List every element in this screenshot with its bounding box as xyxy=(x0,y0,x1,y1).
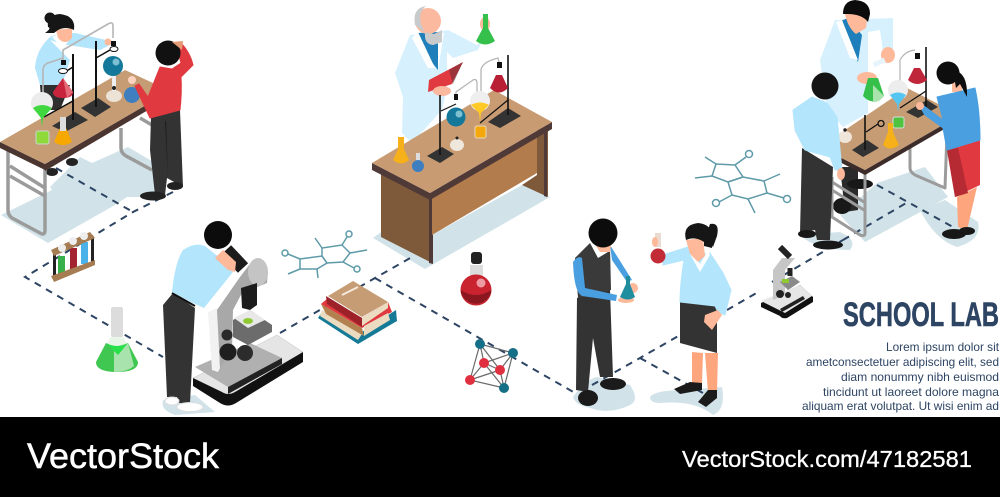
test tube rack xyxy=(51,232,95,282)
description text: ametconsectetuer adipiscing elit, sed xyxy=(806,355,999,369)
right desk legs xyxy=(832,133,947,236)
equipment on right desk xyxy=(838,47,938,157)
center desk xyxy=(372,6,552,264)
man in light blue shirt xyxy=(793,72,845,250)
stack of books xyxy=(318,281,397,344)
desk top xyxy=(0,70,170,171)
right desk top xyxy=(820,88,960,175)
stands and flasks on center desk xyxy=(393,55,521,172)
footer watermark bar: VectorStock.com/47182581 xyxy=(682,446,972,472)
footer watermark bar xyxy=(0,417,1000,497)
teacher in lab coat xyxy=(820,0,895,214)
red round bottom flask xyxy=(460,252,492,306)
molecule right xyxy=(695,150,790,213)
molecule left xyxy=(282,231,367,278)
desk top xyxy=(372,90,552,200)
woman in red skirt xyxy=(916,62,980,239)
retort stands xyxy=(44,41,111,132)
flasks on left desk xyxy=(31,41,140,145)
description text: Lorem ipsum dolor sit xyxy=(886,340,1000,354)
desk body panels xyxy=(381,125,548,264)
description text: tincidunt ut laoreet dolore magna xyxy=(823,385,999,399)
ball and stick molecule xyxy=(465,339,518,393)
student with vest xyxy=(573,218,638,406)
student woman with red flask xyxy=(650,223,731,407)
footer watermark bar: VectorStock xyxy=(27,437,220,476)
right desk group xyxy=(793,0,980,250)
desk legs xyxy=(8,118,152,234)
man at microscope xyxy=(163,221,236,412)
shadows under desks xyxy=(1,147,979,415)
description text xyxy=(802,340,1000,413)
description text: aliquam erat volutpat. Ut wisi enim ad xyxy=(802,399,999,413)
small microscope xyxy=(761,247,813,318)
woman behind left desk xyxy=(35,12,112,176)
green flask held up xyxy=(476,14,495,44)
glass tubing xyxy=(43,23,113,93)
scientist xyxy=(395,6,490,143)
large microscope xyxy=(193,250,303,406)
man in red sweater xyxy=(135,40,193,200)
dashed connector lines xyxy=(25,168,953,393)
green conical flask xyxy=(96,307,138,372)
left desk with experiment xyxy=(0,12,193,234)
description text: diam nonummy nibh euismod xyxy=(841,370,999,384)
